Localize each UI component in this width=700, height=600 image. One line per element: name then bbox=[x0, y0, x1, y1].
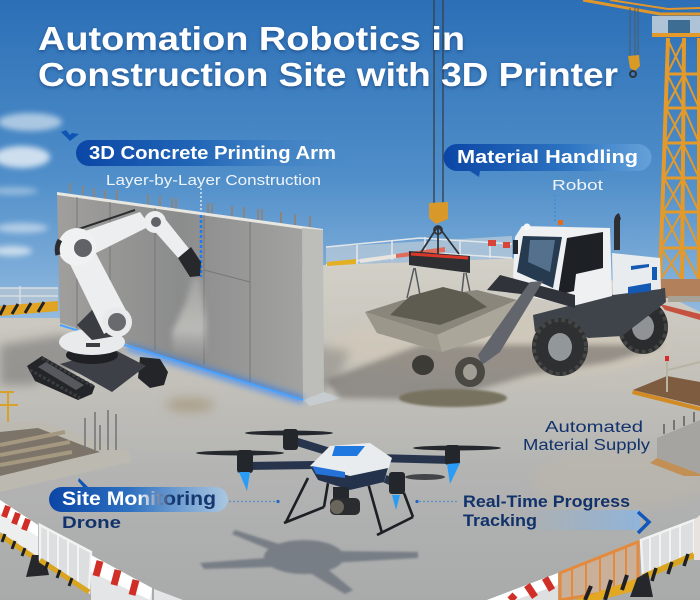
label: site monitoring bbox=[49, 478, 228, 512]
drone bbox=[196, 429, 501, 535]
robot lower arm bbox=[66, 242, 130, 334]
far-right formwork bbox=[632, 356, 700, 411]
wall top edge bbox=[57, 192, 323, 231]
landing gear bbox=[284, 478, 413, 535]
right background bricks and barrier bbox=[660, 279, 700, 320]
blue glowing base line bbox=[60, 325, 303, 400]
lifting spreader bar bbox=[407, 251, 470, 298]
fence segment one bbox=[0, 500, 49, 577]
heading text: Material Handling bbox=[457, 147, 638, 167]
fence segment red bbox=[487, 573, 558, 600]
small front wheel bbox=[455, 357, 485, 387]
wall panel joints bbox=[77, 197, 250, 385]
right concrete block bbox=[650, 412, 700, 476]
ground bbox=[0, 258, 700, 600]
arrow chevron bbox=[638, 512, 649, 533]
robot chassis bbox=[60, 349, 146, 392]
title: Construction Site with 3D Printer bbox=[38, 56, 618, 93]
wall rebar bbox=[70, 183, 310, 229]
robot turret bbox=[59, 310, 125, 364]
fence segment end bbox=[694, 515, 700, 560]
gradient band bbox=[500, 510, 640, 530]
text: Real-Time Progress bbox=[463, 493, 630, 511]
concrete wall bbox=[57, 183, 342, 406]
fence segment three bbox=[91, 555, 152, 600]
subtitle: drone: Drone bbox=[62, 513, 121, 532]
crane hook bbox=[628, 8, 640, 77]
site monitoring dotted connector bbox=[229, 500, 280, 503]
exhaust stack bbox=[617, 216, 620, 250]
chevron accent bbox=[61, 130, 79, 141]
background fence behind the wall and truck bbox=[326, 236, 512, 266]
label: automated material supply: Material Supply bbox=[523, 437, 650, 454]
text: Tracking bbox=[463, 512, 537, 530]
crane cab bbox=[652, 16, 700, 37]
left background fence bbox=[0, 286, 58, 316]
robot upper arm bbox=[65, 212, 150, 260]
sky background bbox=[0, 0, 700, 320]
wall footing bbox=[303, 392, 342, 406]
progress tracking dotted connector bbox=[415, 500, 458, 503]
loader boom bbox=[478, 281, 543, 365]
pill bbox=[49, 487, 228, 512]
left foreground fence bbox=[0, 500, 183, 600]
tower crane bbox=[583, 0, 700, 280]
truck ground shadow bbox=[325, 345, 665, 400]
chevron accent bbox=[78, 478, 88, 488]
subtitle: layer-by-layer construction: Layer-by-Layer Construction bbox=[106, 172, 321, 189]
label: automated material supply bbox=[523, 419, 650, 454]
drone LED legs bbox=[239, 463, 460, 510]
truck dotted guide bbox=[554, 195, 556, 221]
crane block bbox=[420, 0, 459, 254]
robot forearm bbox=[150, 215, 190, 260]
blue printed line bbox=[200, 215, 202, 277]
small rear wheel bbox=[412, 355, 434, 375]
fence segment two bbox=[40, 525, 91, 592]
front wheel bbox=[532, 318, 588, 376]
engine housing bbox=[612, 253, 661, 295]
heading text: 3D Concrete Printing Arm bbox=[89, 143, 336, 163]
concrete spray bbox=[172, 278, 206, 358]
ground tonal patches bbox=[0, 311, 700, 510]
drone rotors bbox=[196, 430, 501, 480]
label: material handling bbox=[444, 144, 652, 177]
label: 3D concrete printing arm bbox=[61, 130, 344, 166]
drone motors bbox=[237, 429, 460, 494]
fence segment white bbox=[630, 520, 694, 597]
wall front face bbox=[57, 193, 303, 400]
fence segment orange bbox=[560, 542, 638, 600]
drone camera bbox=[330, 487, 360, 515]
crane jib bbox=[583, 0, 700, 14]
loader frame bbox=[487, 275, 575, 308]
robot arm bbox=[27, 210, 201, 400]
clouds bbox=[0, 113, 62, 256]
drone shadow bbox=[200, 530, 418, 594]
text bbox=[463, 493, 630, 530]
title bbox=[38, 20, 618, 93]
robot joints bbox=[57, 211, 166, 337]
fence segment four bbox=[154, 589, 183, 600]
wall side face bbox=[302, 228, 324, 400]
printing head dotted guide bbox=[200, 188, 202, 215]
label: real-time progress tracking bbox=[463, 493, 649, 533]
drone arms bbox=[246, 440, 452, 484]
pill with tail bbox=[444, 144, 652, 177]
crane mast bbox=[660, 38, 699, 280]
cab bbox=[513, 220, 612, 306]
heading text: Site Monitoring bbox=[62, 489, 216, 510]
right foreground fence bbox=[487, 515, 700, 600]
rear wheel bbox=[618, 300, 668, 354]
concrete bucket bbox=[365, 287, 517, 352]
robot tracks bbox=[27, 356, 168, 400]
pill bbox=[76, 140, 344, 166]
robot nozzle bbox=[178, 247, 201, 277]
spilled concrete pile bbox=[399, 389, 507, 407]
label: automated material supply: Automated bbox=[545, 419, 643, 436]
title: Automation Robotics in bbox=[38, 20, 465, 57]
material handling truck bbox=[325, 0, 668, 407]
drone body bbox=[310, 443, 392, 490]
subtitle: robot: Robot bbox=[552, 177, 604, 194]
truck chassis bbox=[533, 288, 666, 338]
pit with formwork bbox=[0, 392, 131, 492]
